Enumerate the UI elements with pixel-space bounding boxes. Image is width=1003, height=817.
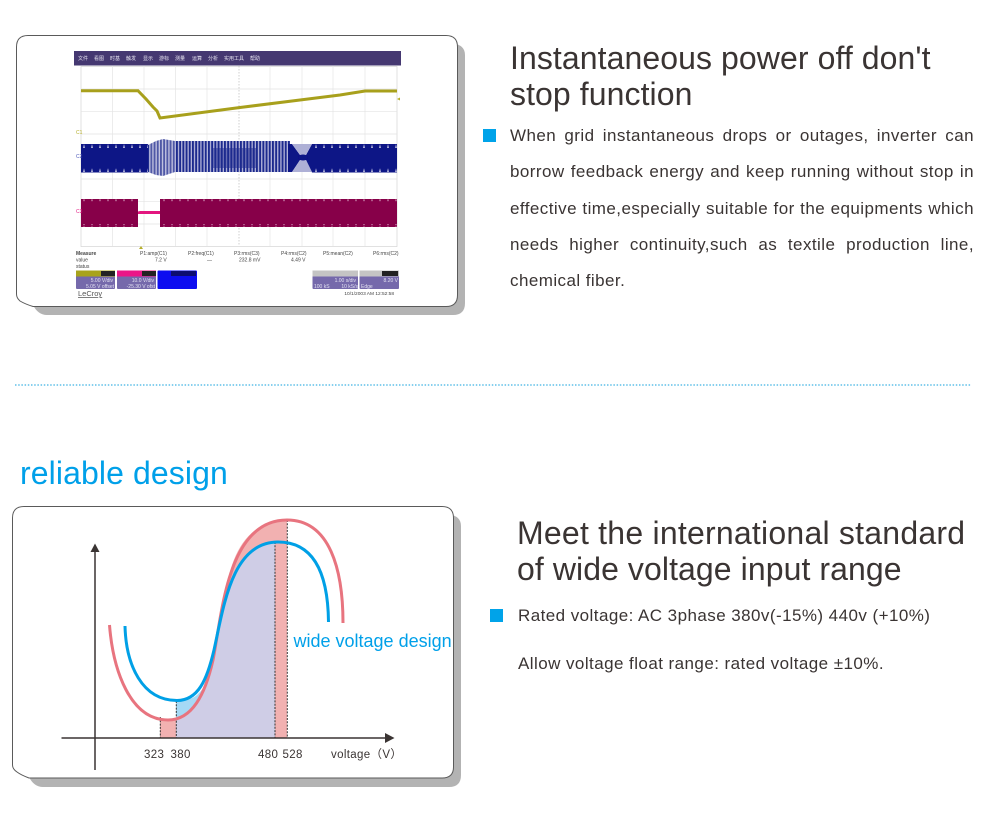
heading: international standard	[517, 514, 965, 586]
channel markers: C1	[76, 130, 83, 136]
blue curve	[125, 542, 328, 700]
measurement table: —	[207, 258, 212, 264]
menu bar: 时基	[110, 55, 120, 62]
measurement table: P4:rms(C2)	[281, 251, 307, 257]
channel readout boxes: 5.00 V/div	[91, 278, 113, 284]
x axis	[62, 733, 394, 743]
capture timestamp: 10/1/2003 AM 12:52:58	[344, 291, 394, 297]
channel readout boxes: 1.00 s/div	[335, 278, 356, 284]
menu bar: 游标	[159, 55, 169, 62]
text block: power off description	[510, 126, 974, 290]
axis value labels: 380	[170, 749, 191, 761]
channel markers: C3	[76, 209, 83, 215]
channel readout boxes: Edge	[361, 284, 373, 290]
channel readout boxes: 100 kS	[314, 284, 330, 290]
channel readout boxes: 10.0 V/div	[132, 278, 154, 284]
text block: allowed voltage float: Allow voltage float range: rated voltage ±10%.	[518, 654, 884, 672]
measurement table: P1:amp(C1)	[140, 251, 167, 257]
measurement table: value	[76, 258, 88, 264]
axis value labels	[144, 748, 402, 761]
bullet icon: second section	[490, 608, 503, 622]
menu bar: 显示	[143, 56, 153, 62]
channel readout boxes: 8.20 V	[384, 278, 399, 284]
pink band 323 to 380	[160, 718, 176, 738]
axis value labels: 480	[258, 749, 278, 761]
waveform grid	[81, 66, 397, 246]
text block: rated voltage: Rated voltage: AC 3phase 380v(-15%) 440v (+10%)	[518, 606, 930, 624]
axis value labels: 323	[144, 749, 164, 761]
measurement table: 4.49 V	[291, 258, 306, 264]
measurement table: status	[76, 264, 90, 270]
menu bar: 看图	[94, 55, 104, 62]
menu bar	[74, 51, 401, 66]
heading: international standard: Meet the international standard	[517, 514, 965, 550]
area fills under curves	[160, 520, 287, 738]
heading: international standard: of wide voltage input range	[517, 550, 902, 586]
channel readout boxes: 5.05 V offset	[86, 284, 115, 290]
measurement table: P2:freq(C1)	[188, 251, 214, 257]
channel markers	[76, 98, 400, 249]
measurement table: 232.8 mV	[239, 258, 261, 264]
heading: instantaneous power off	[510, 40, 931, 112]
panel: voltage chart card	[12, 506, 461, 787]
measurement table: 7.2 V	[155, 258, 167, 264]
blue trace C2	[81, 139, 397, 176]
text block: power off description: chemical fiber.	[510, 271, 625, 290]
measurement table: P3:rms(C3)	[234, 251, 260, 257]
measurement table: Measure	[76, 251, 97, 257]
magenta trace C3	[81, 199, 397, 227]
menu bar: 分析	[208, 55, 218, 62]
dashed voltage markers	[160, 520, 287, 738]
channel readout boxes: 10 kS/s	[341, 284, 358, 290]
text block: power off description: borrow feedback energy and keep running without stop in	[510, 162, 974, 181]
measurement table	[76, 251, 399, 270]
channel readout boxes: -25.30 V ofst	[127, 284, 156, 290]
axis value labels: 528	[282, 749, 303, 761]
callout: wide voltage design: wide voltage design	[292, 631, 452, 651]
heading: instantaneous power off: stop function	[510, 76, 692, 112]
bullet icon: first section	[483, 129, 496, 142]
yellow trace C1	[81, 91, 397, 118]
text block: power off description: When grid instantaneous drops or outages, inverter can	[510, 126, 974, 145]
oscilloscope capture	[74, 51, 401, 298]
text block: power off description: effective time,especially suitable for the equipments which	[510, 198, 974, 218]
y axis	[90, 544, 100, 770]
menu bar: 帮助	[250, 55, 260, 62]
pink curve	[110, 520, 343, 720]
menu bar: 测量	[175, 55, 185, 62]
menu bar: 运算	[192, 55, 202, 62]
lavender operating area	[176, 542, 275, 738]
panel: oscilloscope screenshot card	[16, 35, 465, 315]
menu bar: 实用工具	[224, 55, 244, 62]
menu bar: 文件	[78, 55, 88, 62]
LeCroy logo: LeCroy	[78, 289, 102, 298]
heading: reliable design: reliable design	[20, 455, 228, 491]
pink crest band	[224, 520, 287, 738]
axis value labels: voltage（V）	[331, 748, 402, 761]
channel readout boxes	[76, 270, 399, 290]
blue band between curves	[176, 679, 208, 719]
text block: power off description: needs higher continuity,such as textile production line,	[510, 235, 974, 254]
measurement table: P5:mean(C2)	[323, 251, 353, 257]
channel markers: C2	[76, 154, 83, 160]
menu bar: 触发	[126, 55, 136, 62]
measurement table: P6:rms(C2)	[373, 251, 399, 257]
heading: instantaneous power off: Instantaneous power off don't	[510, 40, 931, 76]
